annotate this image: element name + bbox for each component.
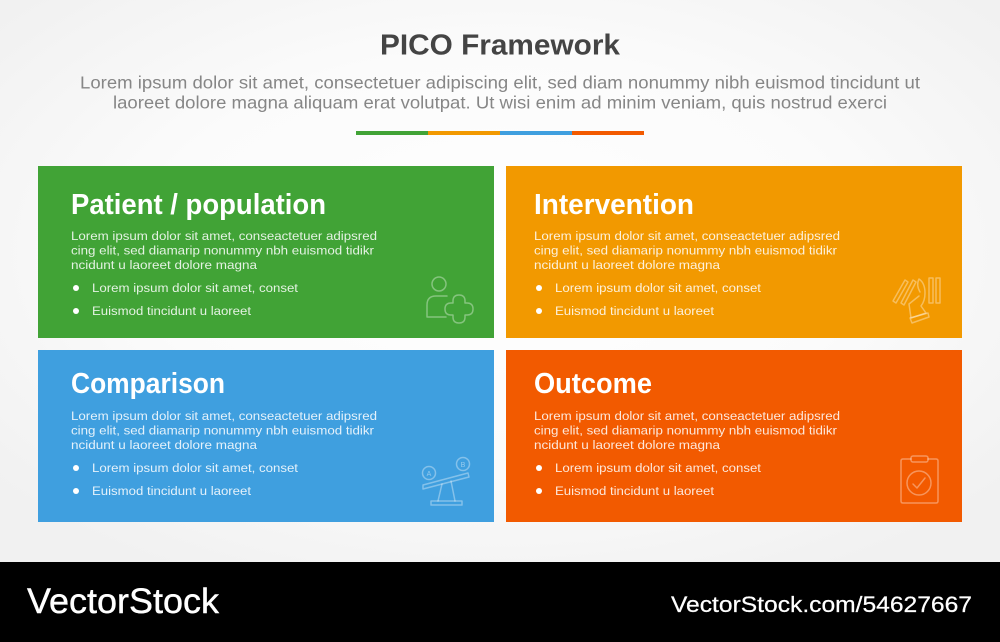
body text: comparison: cing elit, sed diamarip nonummy nbh euismod tidikr: [71, 424, 374, 438]
body text: patient: cing elit, sed diamarip nonummy nbh euismod tidikr: [71, 244, 374, 258]
icon: seesaw scale: A: [427, 471, 432, 478]
bullet list: outcome: [536, 461, 762, 498]
footer logo text: VectorStock: [27, 582, 220, 621]
icon: clipboard with check: [901, 456, 938, 503]
panel: outcome: [506, 350, 962, 522]
bullet list: patient: Euismod tincidunt u laoreet: [92, 304, 252, 318]
bullet list: intervention: [536, 281, 762, 318]
body text: outcome: cing elit, sed diamarip nonummy nbh euismod tidikr: [534, 424, 837, 438]
body text: intervention: Lorem ipsum dolor sit amet, conseactetuer adipsred: [534, 229, 840, 243]
bullet list: patient: Lorem ipsum dolor sit amet, conset: [92, 281, 299, 295]
bullet list: comparison: Euismod tincidunt u laoreet: [92, 484, 252, 498]
body text: comparison: Lorem ipsum dolor sit amet, conseactetuer adipsred: [71, 409, 377, 423]
body text: outcome: ncidunt u laoreet dolore magna: [534, 438, 720, 452]
body text: patient: [71, 229, 377, 272]
bullet list: outcome: Euismod tincidunt u laoreet: [555, 484, 715, 498]
icon: seesaw scale: B: [461, 462, 466, 469]
bullet list: outcome: Lorem ipsum dolor sit amet, conset: [555, 461, 762, 475]
subtitle text: laoreet dolore magna aliquam erat volutpat. Ut wisi enim ad minim veniam, quis nostrud exerci: [113, 92, 887, 112]
bullet list: comparison: Lorem ipsum dolor sit amet, conset: [92, 461, 299, 475]
panel: comparison: [38, 350, 494, 522]
body text: patient: Lorem ipsum dolor sit amet, conseactetuer adipsred: [71, 229, 377, 243]
heading: patient / population: Patient / population: [71, 189, 326, 221]
bullet list: comparison: [73, 461, 299, 498]
body text: patient: ncidunt u laoreet dolore magna: [71, 258, 257, 272]
panel: patient / population: [38, 166, 494, 338]
body text: outcome: [534, 409, 840, 452]
title: PICO Framework: [380, 30, 621, 62]
body text: outcome: Lorem ipsum dolor sit amet, conseactetuer adipsred: [534, 409, 840, 423]
body text: comparison: [71, 409, 377, 452]
footer url: VectorStock.com/54627667: [671, 592, 972, 617]
panel: intervention: [506, 166, 962, 338]
heading: comparison: Comparison: [71, 368, 225, 400]
heading: intervention: Intervention: [534, 189, 694, 221]
icon: person with plus: [427, 277, 473, 323]
body text: intervention: [534, 229, 840, 272]
bullet list: patient: [73, 281, 299, 318]
bullet list: intervention: Lorem ipsum dolor sit amet, conset: [555, 281, 762, 295]
icon: seesaw scale: [422, 458, 470, 505]
subtitle text: [80, 72, 920, 112]
subtitle text: Lorem ipsum dolor sit amet, consectetuer adipiscing elit, sed diam nonummy nibh euismod tincidunt ut: [80, 72, 920, 92]
icon: hand with bars: [893, 278, 940, 323]
footer bar: [0, 562, 1000, 642]
body text: intervention: ncidunt u laoreet dolore magna: [534, 258, 720, 272]
bullet list: intervention: Euismod tincidunt u laoreet: [555, 304, 715, 318]
body text: comparison: ncidunt u laoreet dolore magna: [71, 438, 257, 452]
body text: intervention: cing elit, sed diamarip nonummy nbh euismod tidikr: [534, 244, 837, 258]
heading: outcome: Outcome: [534, 368, 652, 400]
four-colour divider: [356, 131, 644, 135]
